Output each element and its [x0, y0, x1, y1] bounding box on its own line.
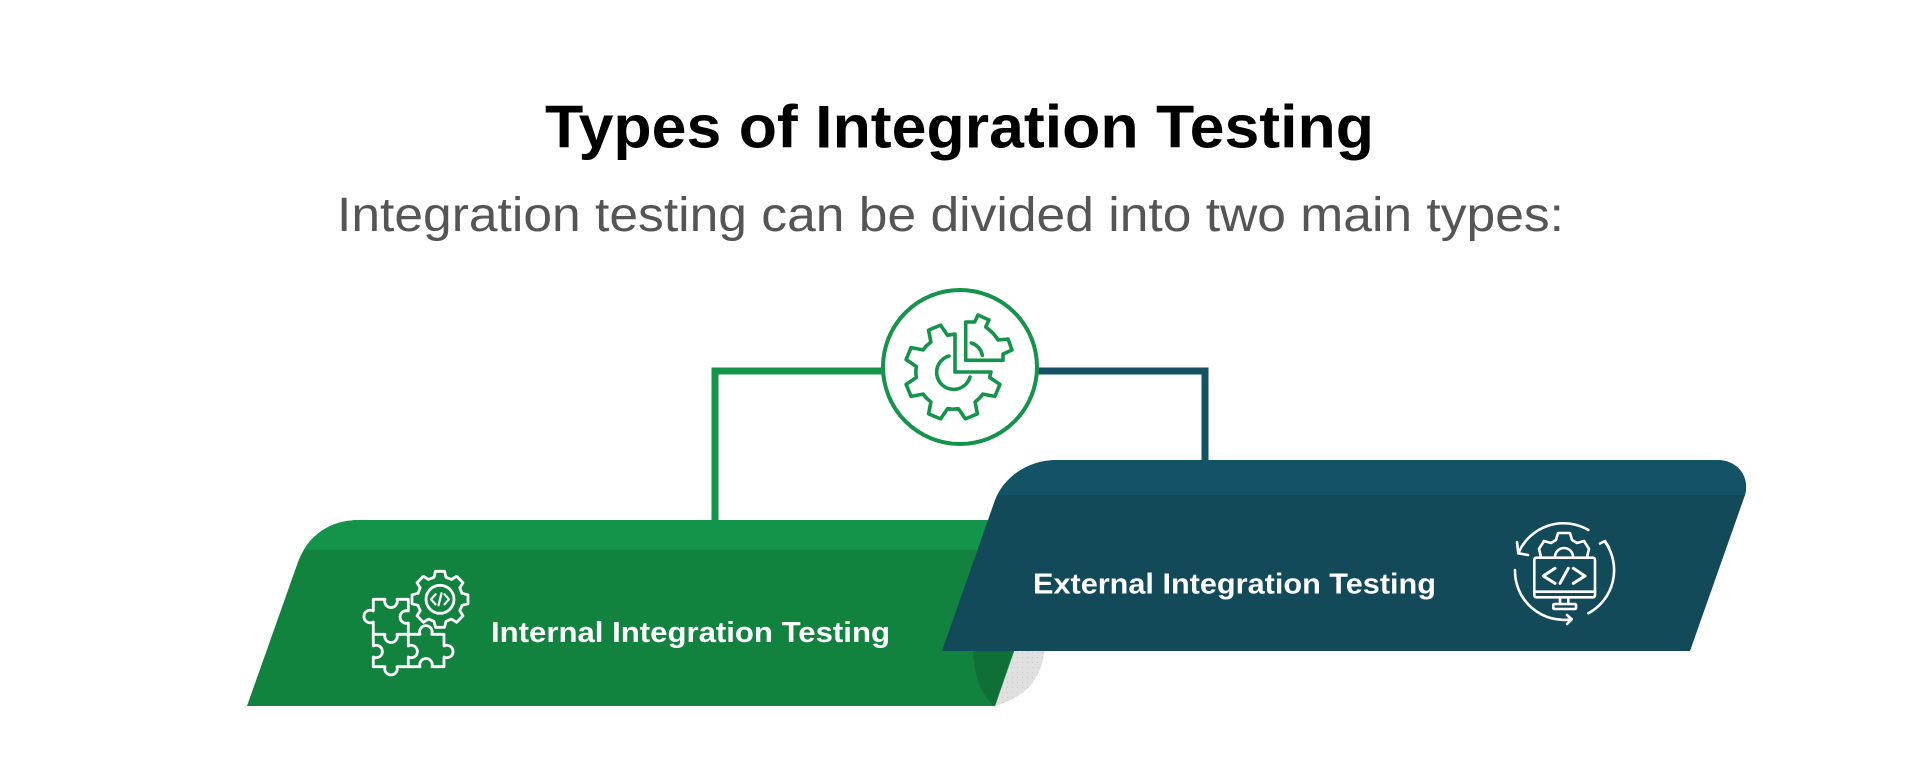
icon: puzzle and gear	[364, 571, 468, 675]
panel: internal integration testing	[240, 515, 1070, 710]
icon: gear with pie slice	[906, 315, 1012, 419]
panel: external integration testing	[935, 455, 1755, 655]
gray shadow behind panel	[995, 645, 1045, 706]
label: internal integration testing: Internal Integration Testing	[491, 617, 890, 649]
subtitle: Integration testing can be divided into two main types:	[337, 189, 1564, 242]
label: external integration testing: External Integration Testing	[1033, 568, 1436, 600]
connector: teal line to external panel	[1030, 371, 1205, 465]
teal panel body	[935, 455, 1755, 655]
connector: green line to internal panel	[715, 371, 890, 525]
dark fold on panel	[973, 645, 1015, 706]
central circle icon	[883, 290, 1037, 444]
icon: monitor with code and cycle arrows	[1515, 523, 1614, 624]
green panel body	[247, 520, 1014, 706]
title: Types of Integration Testing	[545, 94, 1374, 160]
